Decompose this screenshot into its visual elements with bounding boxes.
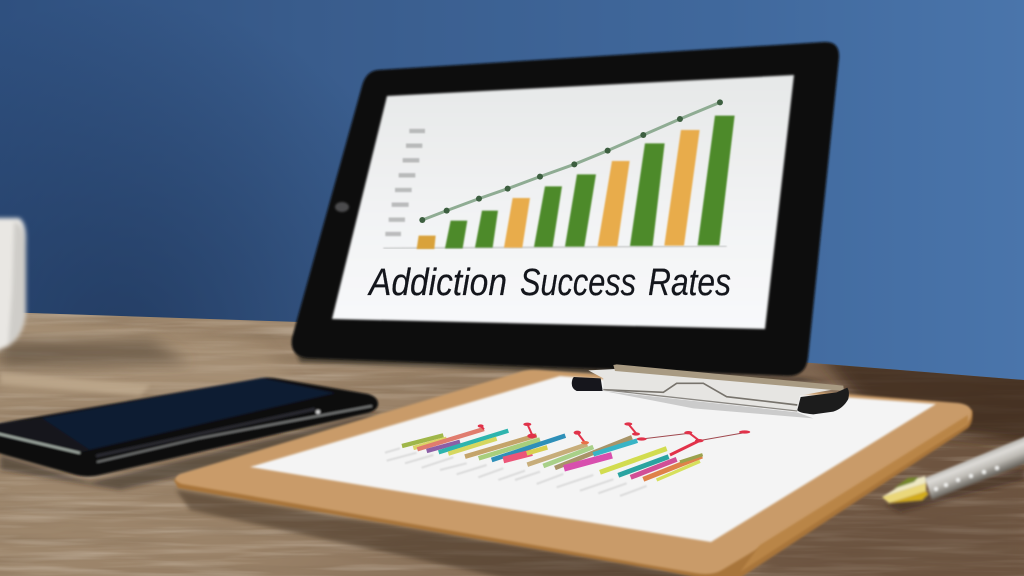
- clipboard clip: [572, 364, 849, 418]
- pen dots: [934, 466, 999, 491]
- clip shadow: [603, 391, 813, 418]
- tablet title: Success: [520, 262, 636, 304]
- clip left end: [572, 377, 603, 391]
- baseline: [383, 246, 727, 248]
- clip tan bar: [613, 364, 844, 391]
- tablet camera: [335, 202, 349, 212]
- tablet shadow: [296, 350, 830, 382]
- phone body: [0, 378, 378, 476]
- clip curve: [603, 383, 797, 405]
- pen tip: [882, 476, 926, 497]
- clipboard edge: [174, 376, 972, 576]
- bar chart on tablet: [383, 99, 735, 249]
- clipboard board: [175, 370, 971, 574]
- group 3 bars: [527, 437, 637, 468]
- trend line: [419, 99, 723, 223]
- tablet title: [367, 262, 731, 304]
- phone screen: [42, 378, 335, 452]
- group 4 bars: [600, 449, 703, 480]
- red markers and line: [478, 422, 750, 455]
- clipboard: [174, 364, 972, 576]
- tablet title: Rates: [648, 262, 731, 304]
- bars: [417, 116, 735, 249]
- paper chart: [385, 422, 750, 496]
- coffee cup: [0, 218, 26, 354]
- paper chart labels: [385, 448, 647, 496]
- tablet title: Addiction: [367, 262, 507, 304]
- pen: [882, 433, 1024, 512]
- phone shadow: [0, 412, 380, 490]
- wooden desk: [0, 300, 1024, 576]
- pen shadow: [885, 468, 1024, 512]
- group 2 bars: [465, 435, 565, 460]
- tablet: [292, 42, 839, 382]
- smartphone: [0, 378, 380, 490]
- clip right end: [797, 388, 849, 414]
- axis labels: [385, 131, 425, 234]
- tablet screen: [332, 75, 794, 329]
- phone highlights: [0, 433, 80, 453]
- paper: [250, 376, 936, 542]
- pen barrel: [925, 433, 1024, 499]
- tablet body: [292, 42, 839, 376]
- clip silver plate: [588, 369, 843, 410]
- blue wall: [0, 0, 1024, 390]
- clipboard shadow: [176, 490, 720, 576]
- group 1 bars: [402, 429, 508, 454]
